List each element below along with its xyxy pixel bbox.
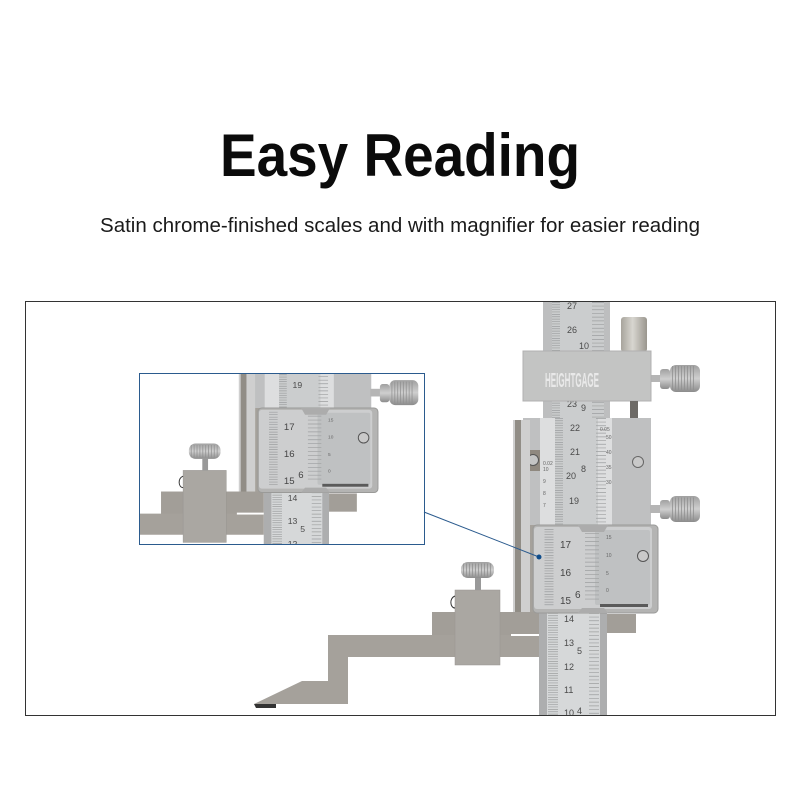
upper slider with vernier: 50: [606, 435, 612, 441]
magnifier slider: 5: [606, 571, 609, 577]
inset magnifier slider: 5: [328, 452, 331, 458]
upper beam with scale: [543, 301, 610, 418]
upper slider with vernier: 10: [543, 467, 549, 473]
subtitle: Satin chrome-finished scales and with magnifier for easier reading: [100, 215, 700, 237]
magnifier slider: 15: [560, 596, 572, 607]
lower beam with scale: 13: [564, 638, 574, 648]
inset magnifier slider: [258, 408, 378, 492]
upper slider with vernier: 22: [570, 423, 580, 433]
upper slider with vernier: 7: [543, 503, 546, 509]
inset right knob: [370, 380, 418, 405]
upper slider with vernier: [523, 418, 651, 525]
upper slider with vernier: 0.02: [543, 461, 553, 467]
inset guide rod: [238, 374, 260, 492]
title: Easy Reading: [220, 122, 580, 189]
right adjustment knob upper: [650, 365, 700, 392]
head block with brand: [523, 351, 651, 401]
lower beam with scale: 5: [577, 646, 582, 656]
lower beam with scale: 11: [564, 685, 573, 695]
top locking knob: [621, 317, 647, 352]
lower beam with scale: [539, 613, 607, 718]
upper beam with scale: 27: [567, 301, 577, 311]
inset lower beam: 13: [288, 516, 298, 526]
upper slider with vernier: 30: [606, 480, 612, 486]
inset magnifier slider: 10: [328, 435, 334, 441]
lower beam with scale: 12: [564, 662, 574, 672]
vertical guide rod: [513, 420, 535, 612]
magnifier slider: 6: [575, 590, 581, 601]
upper beam with scale: 10: [579, 341, 589, 351]
inset magnified view: [139, 373, 425, 545]
depth arm: [254, 612, 636, 708]
lower beam with scale: 14: [564, 614, 574, 624]
inset lower beam: 12: [288, 539, 298, 549]
inset magnifier slider: 15: [284, 476, 295, 487]
clamp block: [455, 590, 500, 665]
height gauge illustration: [254, 301, 700, 718]
magnifier slider: 16: [560, 568, 572, 579]
callout leader line with dot: [424, 512, 542, 560]
magnifier slider: 0: [606, 588, 609, 594]
inset clamp knob: [179, 444, 221, 488]
inset gauge close-up: [140, 374, 418, 544]
main photo panel: [26, 301, 776, 718]
upper slider with vernier: 8: [543, 491, 546, 497]
upper slider with vernier: 19: [569, 496, 579, 506]
lower beam with scale: 4: [577, 706, 582, 716]
inset lower beam: [264, 493, 329, 544]
magnifier slider: 15: [606, 535, 612, 541]
upper slider with vernier: 40: [606, 450, 612, 456]
upper slider with vernier: 20: [566, 471, 576, 481]
clamp knob: [451, 562, 494, 608]
upper slider with vernier: 21: [570, 447, 580, 457]
inset magnifier slider: 17: [284, 422, 295, 433]
upper slider with vernier: 8: [581, 464, 586, 474]
head block with brand: HEIGHTGAGE: [545, 370, 599, 392]
inset magnifier slider: 15: [328, 417, 334, 423]
magnifier slider: [533, 525, 658, 613]
inset arm: [140, 492, 357, 535]
inset lower beam: 5: [300, 524, 305, 534]
inset upper slider: 19: [293, 380, 302, 390]
upper beam with scale: 23: [567, 399, 577, 409]
upper slider with vernier: 9: [543, 479, 546, 485]
right adjustment knob lower: [650, 496, 700, 522]
inset magnifier slider: 16: [284, 449, 295, 460]
inset frame: [140, 374, 424, 544]
inset magnifier slider: 0: [328, 468, 331, 474]
threaded rod: [630, 401, 638, 419]
inset clamp block: [183, 470, 226, 542]
lower beam with scale: 10: [564, 708, 574, 718]
upper beam with scale: 26: [567, 325, 577, 335]
upper slider with vernier: 35: [606, 465, 612, 471]
inset magnifier slider: 6: [298, 470, 304, 481]
inset upper slider: [255, 374, 372, 408]
magnifier slider: 10: [606, 553, 612, 559]
inset lower beam: 14: [288, 493, 298, 503]
magnifier slider: 17: [560, 540, 572, 551]
upper slider with vernier: 0.05: [600, 427, 610, 433]
upper beam with scale: 9: [581, 403, 586, 413]
